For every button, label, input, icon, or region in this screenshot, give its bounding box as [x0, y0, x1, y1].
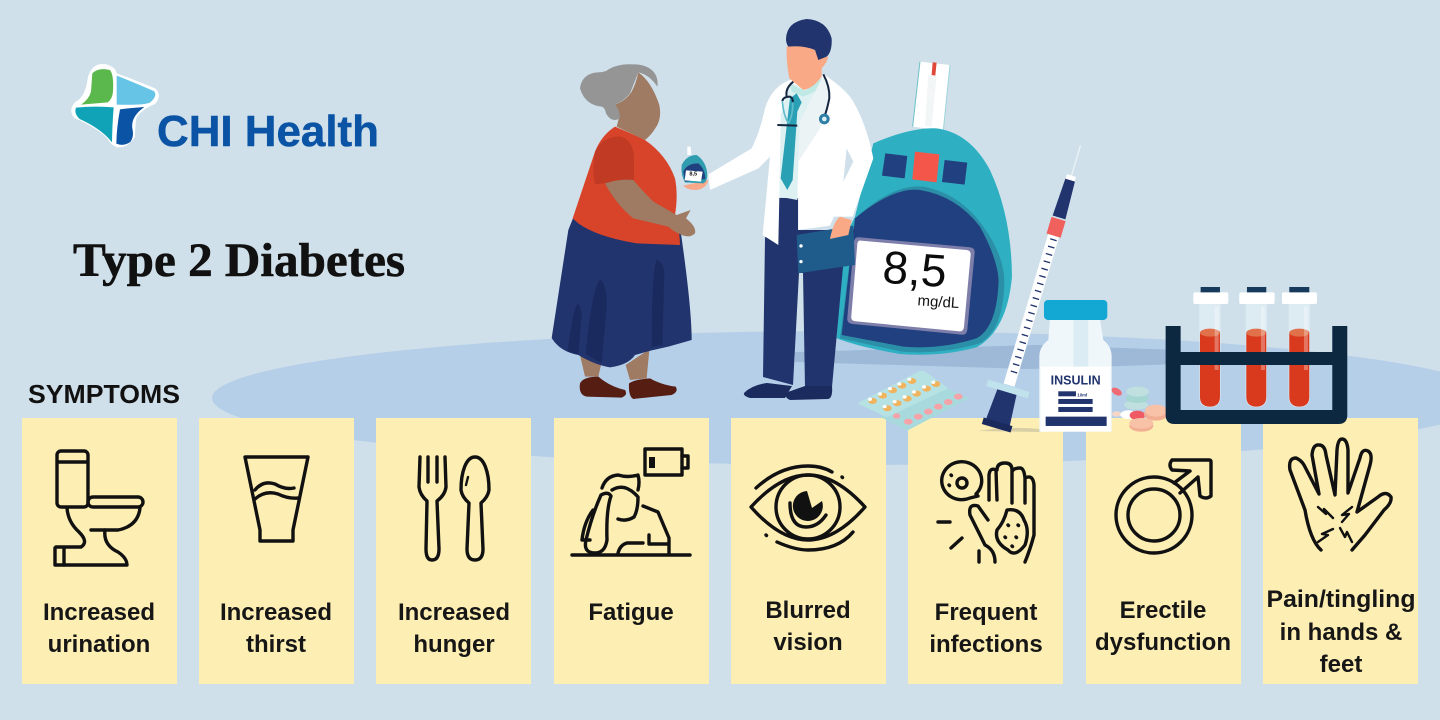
icon: hand with nerve pain — [1290, 439, 1391, 550]
title: Type 2 Diabetes — [73, 234, 405, 287]
logo: CHI Health — [71, 64, 379, 156]
icon: fork and spoon — [419, 457, 489, 560]
illustration: syringe — [975, 139, 1101, 434]
illustration: blood test tubes in rack — [1166, 287, 1347, 424]
trousers — [763, 198, 855, 387]
meter reading: mg/dL — [917, 292, 960, 312]
illustration: glucose meter — [837, 62, 1012, 355]
label: feet — [1320, 651, 1362, 678]
label: Erectile — [1120, 597, 1206, 624]
shoes — [744, 383, 832, 400]
tube 1 — [1193, 287, 1228, 407]
card: pain or tingling — [1263, 418, 1418, 684]
icon: glass of water — [245, 457, 308, 541]
torso, head and held meter: 8,5 — [689, 172, 697, 178]
label: Increased — [398, 599, 510, 626]
label: Increased — [43, 599, 155, 626]
icon: tired person with low battery — [572, 449, 690, 555]
label: infections — [929, 631, 1043, 658]
label: thirst — [246, 631, 306, 658]
tube 3 — [1282, 287, 1317, 407]
label: hunger — [413, 631, 495, 658]
icon: hand with rash and germ bubble — [938, 462, 1034, 562]
heading: symptoms: SYMPTOMS — [28, 379, 180, 409]
label: Frequent — [935, 599, 1037, 626]
illustration: insulin vial: INSULIN — [1051, 373, 1101, 387]
meter reading — [880, 241, 963, 312]
tube 2 — [1239, 287, 1275, 407]
illustration: blister packs — [857, 371, 969, 431]
label: urination — [48, 631, 150, 658]
illustration: elderly woman patient — [552, 64, 708, 399]
icon: toilet — [55, 451, 143, 565]
icon: male symbol — [1116, 460, 1211, 553]
icon: eye — [751, 466, 865, 550]
card: frequent infections — [908, 418, 1063, 684]
card: increased urination — [22, 418, 177, 684]
logo mark — [71, 64, 159, 147]
card: fatigue — [554, 418, 709, 684]
torso, head and held meter — [573, 64, 708, 245]
upper body — [708, 19, 873, 273]
label: vision — [773, 629, 843, 656]
card: erectile dysfunction — [1086, 418, 1241, 684]
label: dysfunction — [1095, 629, 1231, 656]
label: Fatigue — [588, 599, 674, 626]
label: in hands & — [1280, 619, 1402, 646]
illustration: insulin vial: 10ml — [1077, 392, 1087, 397]
rack — [1166, 326, 1347, 424]
card: increased hunger — [376, 418, 531, 684]
illustration: loose pills — [1110, 386, 1168, 432]
illustration: doctor — [708, 19, 873, 400]
syringe ground shadow — [978, 428, 1040, 432]
card: increased thirst — [199, 418, 354, 684]
label: Blurred — [765, 597, 851, 624]
illustration: insulin vial — [1039, 300, 1112, 432]
card: blurred vision — [731, 418, 886, 684]
legs, shoes and skirt — [552, 217, 692, 399]
meter reading: 8,5 — [881, 241, 948, 297]
label: Pain/tingling — [1266, 586, 1416, 613]
floor ellipse — [212, 331, 1440, 465]
logo text: CHI Health — [157, 107, 379, 156]
floor shadow — [795, 345, 1180, 369]
label: Increased — [220, 599, 332, 626]
